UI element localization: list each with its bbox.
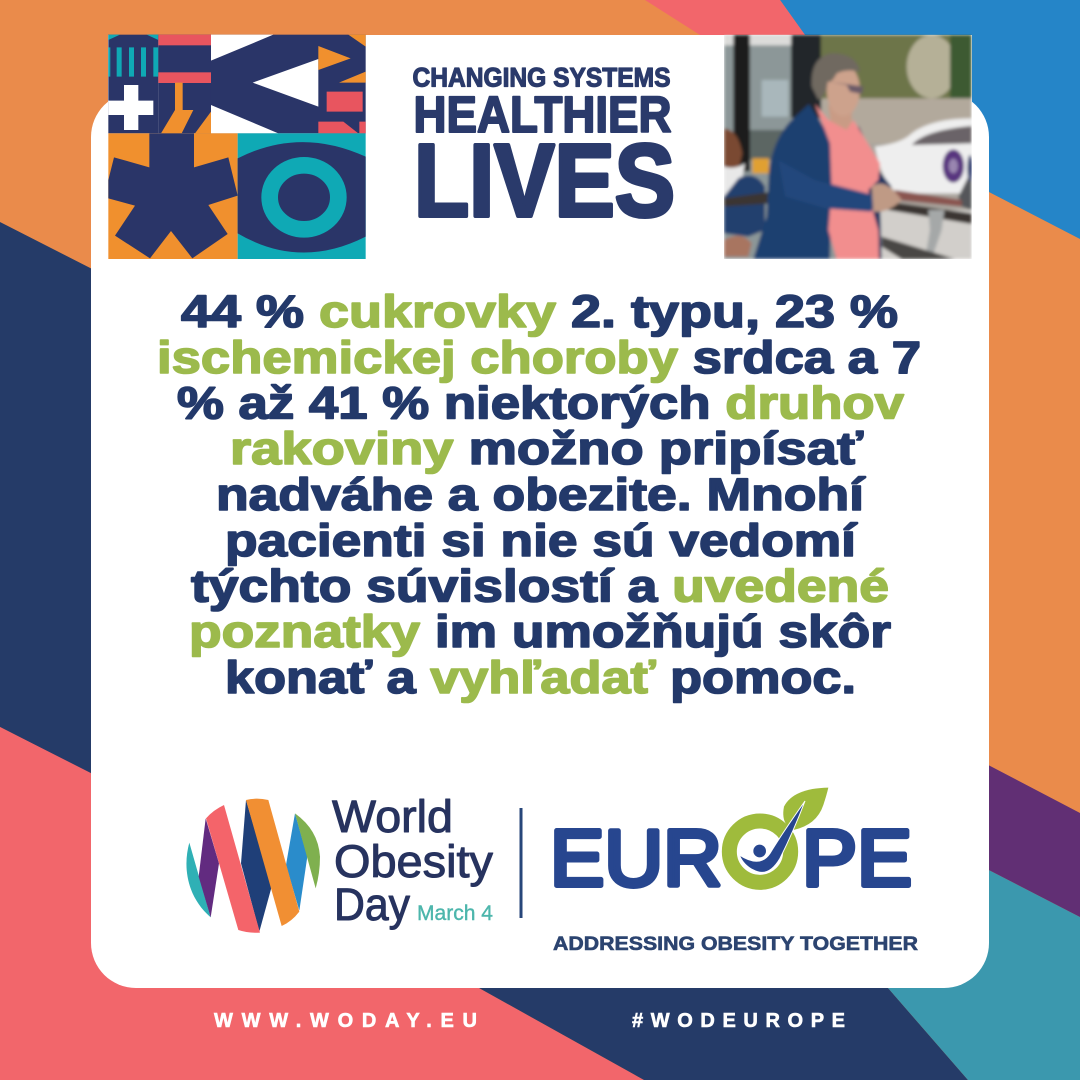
main message text: pacienti si nie sú vedomí [225, 515, 858, 566]
logo: EUROPE [550, 788, 912, 902]
wordmark: Obesity [334, 836, 494, 887]
icon: ribbon globe [186, 799, 320, 933]
icon mosaic: geometric health symbols [108, 35, 366, 259]
wordmark: March 4 [417, 902, 493, 925]
icon: ring, figure and leaf [729, 788, 828, 882]
footer: hashtag: #WODEUROPE [632, 1010, 845, 1032]
main message text: týchto súvislostí a uvedené [191, 560, 889, 612]
panel: white content card [91, 92, 989, 988]
campaign title: LIVES [414, 123, 675, 238]
photo: woman standing at a bus stop [724, 35, 973, 259]
wordmark: Day [334, 879, 410, 930]
main message text: % až 41 % niektorých druhov [177, 378, 905, 428]
logo: EUROPE: PE [802, 814, 912, 902]
main message text: nadváhe a obezite. Mnohí [216, 469, 866, 520]
tagline: ADDRESSING OBESITY TOGETHER [553, 933, 918, 955]
main message text [157, 286, 921, 703]
campaign title: CHANGING SYSTEMS [412, 62, 670, 92]
main message text: konať a vyhľadať pomoc. [225, 652, 856, 703]
header strip [108, 35, 973, 259]
campaign title: HEALTHIER [414, 86, 672, 143]
main message text: rakoviny možno pripísať [230, 423, 863, 474]
wordmark: World [332, 791, 453, 842]
logo: EUROPE: EUR [550, 814, 722, 902]
main message text: ischemickej choroby srdca a 7 [157, 332, 921, 383]
wordmark [332, 791, 494, 930]
main message text: 44 % cukrovky 2. typu, 23 % [181, 286, 898, 337]
footer: website: WWW.WODAY.EU [214, 1010, 477, 1032]
logo: World Obesity Day [186, 791, 494, 933]
campaign title [412, 62, 675, 238]
main message text: poznatky im umožňujú skôr [189, 606, 891, 657]
